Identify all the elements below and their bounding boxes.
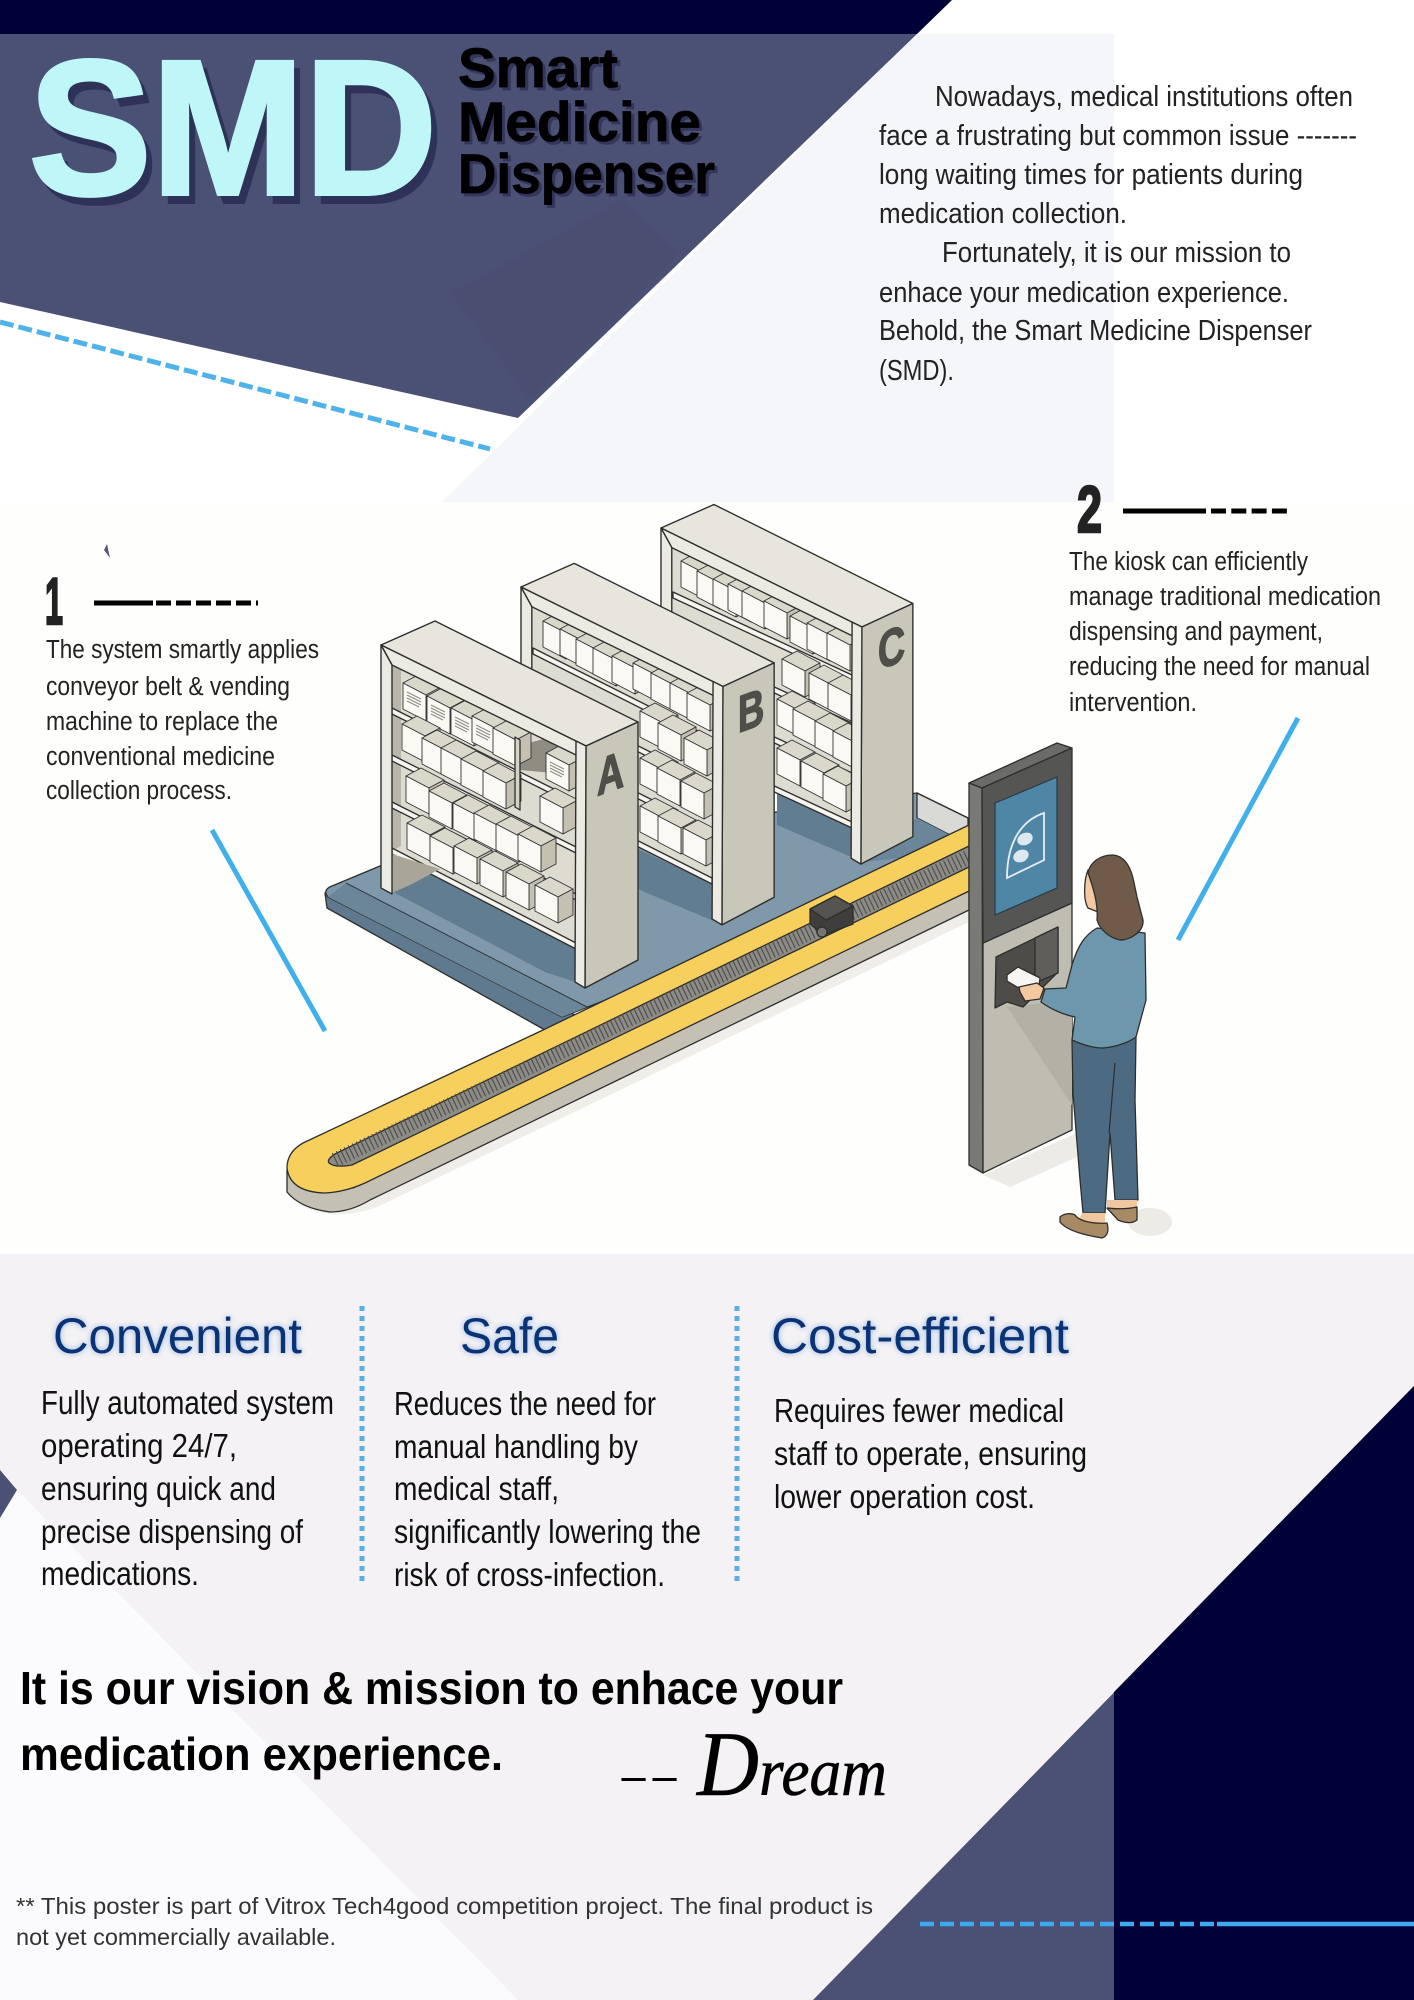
- convenient text: ensuring quick and: [41, 1470, 276, 1507]
- convenient text: operating 24/7,: [41, 1427, 237, 1464]
- mission statement: medication experience.: [20, 1728, 503, 1780]
- safe text: significantly lowering the: [394, 1513, 701, 1550]
- shelf A: A: [597, 739, 624, 807]
- safe text: Reduces the need for: [394, 1385, 656, 1422]
- cost-efficient text: staff to operate, ensuring: [774, 1435, 1087, 1472]
- convenient text: precise dispensing of: [41, 1513, 304, 1550]
- shelf C: C: [878, 613, 905, 681]
- title: Smart Medicine Dispenser: Dispenser: [458, 142, 715, 205]
- safe text: medical staff,: [394, 1470, 559, 1507]
- callout 1 text: conveyor belt & vending: [46, 673, 290, 701]
- callout 1 text: The system smartly applies: [46, 636, 319, 664]
- callout 2 text: [1069, 548, 1381, 717]
- cost-efficient text: lower operation cost.: [774, 1478, 1035, 1515]
- panel: safe: [394, 1308, 701, 1593]
- kiosk screen: [995, 777, 1057, 915]
- kiosk: [969, 743, 1077, 1187]
- intro paragraph: face a frustrating but common issue -------: [879, 120, 1357, 152]
- heading: convenient: Convenient: [53, 1308, 302, 1364]
- signature: Dream: [695, 1713, 887, 1815]
- callout 2: [1069, 472, 1381, 717]
- callout 1: 1: [45, 564, 63, 638]
- intro paragraph: (SMD).: [879, 355, 954, 387]
- shelf A: [381, 621, 638, 988]
- footnote: ** This poster is part of Vitrox Tech4good competition project. The final product is: [16, 1893, 873, 1919]
- callout 1 text: [46, 636, 319, 805]
- cost-efficient text: [774, 1392, 1087, 1515]
- cost-efficient text: Requires fewer medical: [774, 1392, 1064, 1429]
- intro paragraph: enhace your medication experience.: [879, 277, 1289, 309]
- callout 1 text: conventional medicine: [46, 743, 275, 771]
- signature: --: [618, 1753, 680, 1798]
- callout line 2: [1178, 718, 1298, 940]
- convenient text: Fully automated system: [41, 1384, 334, 1421]
- convenient text: medications.: [41, 1555, 199, 1592]
- heading: safe: Safe: [460, 1308, 559, 1364]
- heading: cost-efficient: Cost-efficient: [771, 1308, 1069, 1364]
- numeral 2: 2: [1077, 472, 1102, 546]
- callout 1 text: collection process.: [46, 777, 232, 805]
- platform floor: [325, 780, 968, 1030]
- callout 2 text: manage traditional medication: [1069, 583, 1381, 611]
- callout 2 text: intervention.: [1069, 689, 1197, 717]
- belt cart: [810, 896, 853, 937]
- mission statement: [20, 1662, 843, 1780]
- decorative dashed line top: [0, 322, 490, 449]
- kiosk dispensing slot: [995, 927, 1058, 1008]
- shelf C: [661, 504, 913, 864]
- callout 2 text: reducing the need for manual: [1069, 653, 1370, 681]
- title: Smart Medicine Dispenser: Medicine: [458, 90, 701, 153]
- signature: [618, 1713, 887, 1815]
- decorative bottom line: [920, 1922, 1414, 1926]
- intro paragraph: medication collection.: [879, 198, 1127, 230]
- callout 2 text: The kiosk can efficiently: [1069, 548, 1308, 576]
- intro paragraph: [879, 81, 1357, 387]
- panel: convenient: [41, 1308, 334, 1592]
- footnote: [16, 1893, 873, 1950]
- callout 1 text: machine to replace the: [46, 708, 278, 736]
- callout 1: [45, 564, 319, 805]
- panel: cost-efficient: [771, 1308, 1087, 1515]
- illustration: medicine dispensing system: [287, 504, 1172, 1238]
- conveyor belt: [287, 825, 969, 1214]
- title: Smart Medicine Dispenser: Smart: [458, 36, 618, 99]
- title: SMD: SMD: [29, 20, 437, 235]
- convenient text: [41, 1384, 334, 1592]
- callout 2 text: dispensing and payment,: [1069, 618, 1323, 646]
- person: [1019, 855, 1172, 1238]
- intro paragraph: Behold, the Smart Medicine Dispenser: [879, 315, 1312, 347]
- mission statement: It is our vision & mission to enhace your: [20, 1662, 843, 1714]
- intro paragraph: Fortunately, it is our mission to: [942, 237, 1291, 269]
- callout line 1: [212, 830, 325, 1031]
- title: Smart Medicine Dispenser: [458, 36, 715, 205]
- footnote: not yet commercially available.: [16, 1924, 336, 1950]
- shelf B: [521, 563, 774, 925]
- safe text: risk of cross-infection.: [394, 1556, 665, 1593]
- shelf B: B: [738, 676, 764, 744]
- safe text: manual handling by: [394, 1428, 638, 1465]
- intro paragraph: Nowadays, medical institutions often: [935, 81, 1353, 113]
- intro paragraph: long waiting times for patients during: [879, 159, 1303, 191]
- safe text: [394, 1385, 701, 1593]
